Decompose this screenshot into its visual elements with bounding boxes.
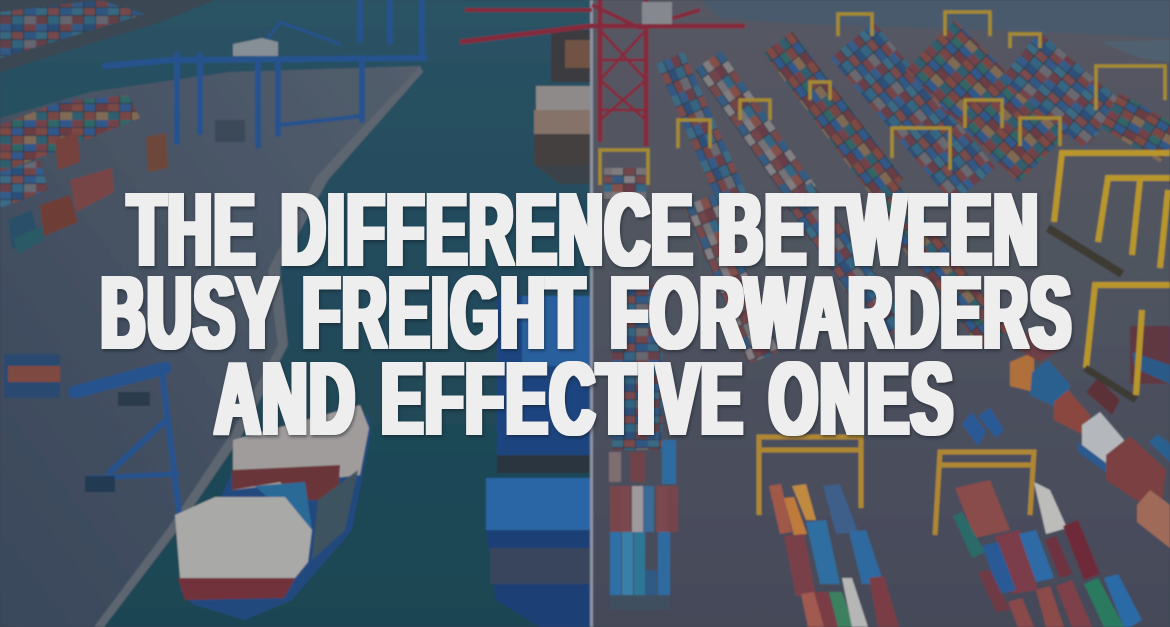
right scene: yellow gantries foreground (759, 437, 1034, 535)
right scene: far water (700, 0, 1170, 38)
divider line (590, 0, 593, 627)
left scene: blue crane bottom (75, 368, 179, 512)
title (101, 172, 1073, 456)
right scene: container rows upper (604, 20, 1170, 450)
left scene: water (0, 0, 592, 627)
left scene: blue cranes top (105, 0, 425, 146)
right scene: containers centre bottom (769, 484, 899, 627)
right scene: red crane (460, 0, 745, 146)
left scene: container stacks (0, 95, 245, 398)
right scene: containers right bottom (953, 480, 1142, 627)
left scene: ship top right (534, 30, 591, 184)
left scene: blue ship (486, 296, 591, 627)
right scene: crane machinery (642, 2, 672, 24)
right scene: yellow gantries far (600, 12, 1165, 185)
left scene: crane machine house (233, 38, 278, 56)
left scene: upper quay strip (0, 0, 215, 72)
right scene: container column bottom left (609, 440, 678, 610)
right scene: yellow gantries near (1048, 153, 1170, 400)
right scene: ground (592, 0, 1170, 627)
left scene: quay edge (94, 66, 423, 627)
left scene: cargo ship bottom (175, 405, 371, 620)
right scene: containers far right (962, 326, 1170, 548)
left scene: main quay (0, 66, 420, 627)
